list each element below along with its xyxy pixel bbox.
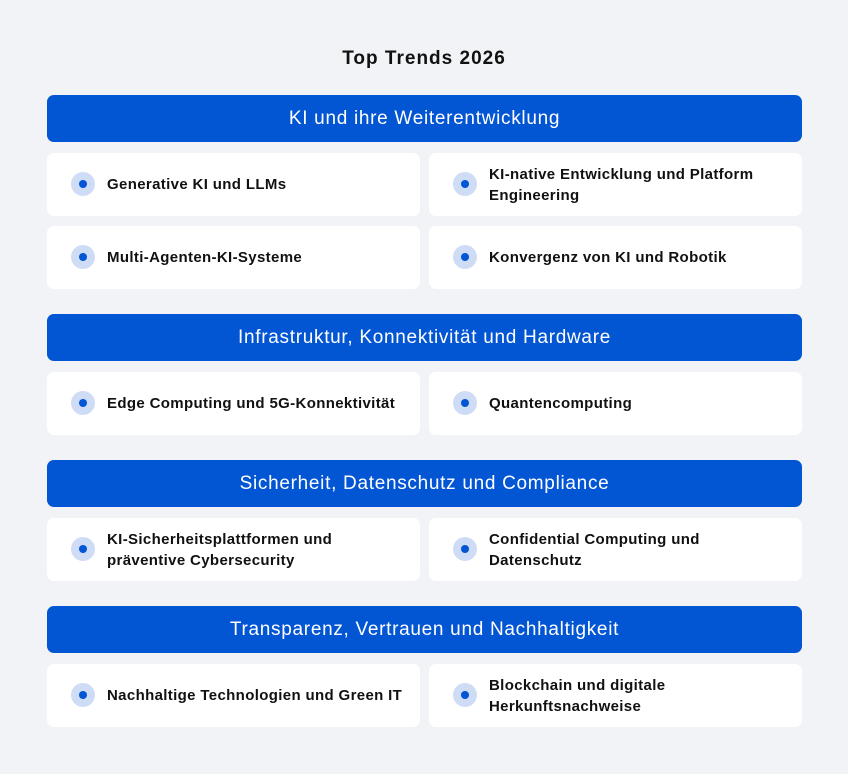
card: KI-native: [429, 153, 802, 216]
card: Blockchain: [429, 664, 802, 727]
card: Edge: [47, 372, 420, 435]
card: KI-native: KI-native Entwicklung und Platform Engineering: [489, 166, 753, 204]
card: Edge: Edge Computing und 5G-Konnektivität: [107, 395, 395, 412]
card: Generative KI: [47, 153, 420, 216]
section header: Infrastruktur: [47, 314, 802, 361]
card: Nachhaltige: [47, 664, 420, 727]
card: Konvergenz: Konvergenz von KI und Robotik: [489, 249, 727, 266]
section header: Sicherheit: Sicherheit, Datenschutz und Compliance: [240, 472, 609, 494]
section header: KI: [47, 95, 802, 142]
card: Confidential: [429, 518, 802, 581]
card: Quanten: Quantencomputing: [489, 395, 632, 412]
card: Quanten: [429, 372, 802, 435]
card: Generative KI: Generative KI und LLMs: [107, 176, 286, 193]
section header: Infrastruktur: Infrastruktur, Konnektivität und Hardware: [238, 326, 611, 348]
card: Confidential: Confidential Computing und Datenschutz: [489, 530, 700, 568]
title: Top Trends 2026: [342, 48, 506, 69]
section header: Sicherheit: [47, 460, 802, 507]
card: KI-Sicherheit: KI-Sicherheitsplattformen und präventive Cybersecurity: [107, 530, 332, 568]
card: Blockchain: Blockchain und digitale Herkunftsnachweise: [489, 676, 665, 714]
section header: KI: KI und ihre Weiterentwicklung: [289, 108, 560, 128]
card: Konvergenz: [429, 226, 802, 289]
card: KI-Sicherheit: [47, 518, 420, 581]
section header: Transparenz: Transparenz, Vertrauen und Nachhaltigkeit: [230, 618, 619, 640]
card: Multi-Agenten: Multi-Agenten-KI-Systeme: [107, 249, 302, 266]
card: Multi-Agenten: [47, 226, 420, 289]
section header: Transparenz: [47, 606, 802, 653]
card: Nachhaltige: Nachhaltige Technologien und Green IT: [107, 687, 402, 704]
